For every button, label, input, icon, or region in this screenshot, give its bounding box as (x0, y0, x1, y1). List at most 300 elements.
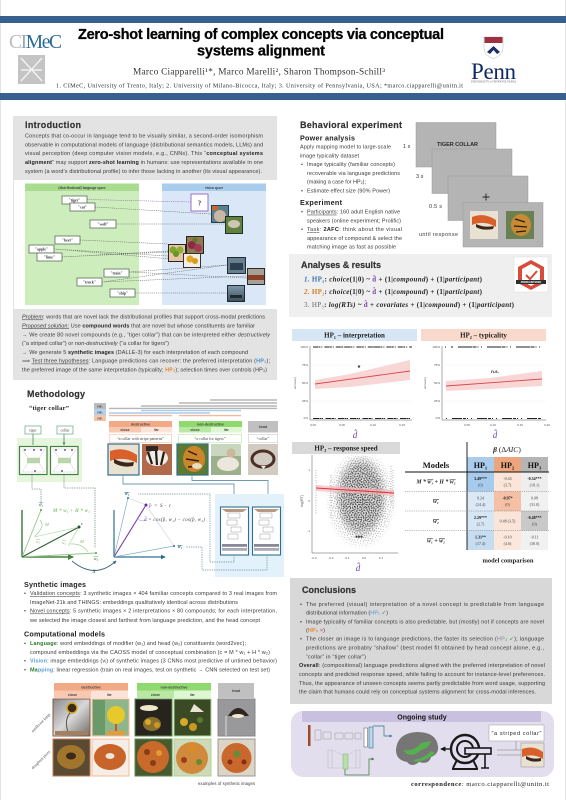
image: ship (227, 285, 245, 302)
coefficient values: (24.4) (476, 502, 486, 507)
timing labels: until response (419, 232, 458, 238)
coefficient values: (4.6) (504, 541, 512, 546)
figure: examples of synthetic images (30, 683, 255, 786)
axis labels: -0.3 (311, 556, 317, 560)
condition headers: non-destructive (197, 422, 224, 426)
caption: examples of synthetic images (198, 781, 255, 786)
significance stars: *** (355, 535, 363, 542)
arrows to scanner (497, 741, 521, 755)
text block: introduction body: alignment” may support zero-shot learning in humans: use representations available in one (25, 160, 263, 166)
image: lamp head (218, 699, 255, 736)
text block: power analysis: recoverable via language predictions (307, 171, 400, 177)
title: Zero-shot learning of complex concepts via conceptual (78, 27, 444, 43)
text block: power analysis: image typicality dataset (300, 153, 359, 159)
choice image: tiger (506, 211, 534, 239)
text block: conclusion bullets: predictions are probably “shallow” (best model fit obtained by head concept alone, e.g., (306, 646, 544, 652)
table title: β (ΔAIC) (492, 445, 521, 454)
axis labels: 1 (308, 468, 310, 472)
heading bar: Ongoing study (397, 714, 447, 722)
chart header: HP₂ – typicality (460, 332, 507, 340)
text block: problem and solution: ⟹ Test three hypotheses: Language predictions can recover: the preferred interpretation (HP₁); (22, 359, 270, 365)
text block: power analysis: Apply mapping model to large-scale (300, 145, 391, 151)
axis labels: 0.1 (379, 556, 383, 560)
coefficient values: (17.4) (476, 541, 486, 546)
word labels (35, 198, 128, 295)
regression line (315, 371, 410, 384)
distance formula: d̂ = cos(p̂, w₁) − cos(p̂, w₂) (144, 517, 205, 523)
text block: problem and solution (22, 314, 271, 374)
panel: introduction (13, 116, 277, 380)
condition headers: head (259, 425, 267, 429)
connectors from images to CNNs (123, 475, 268, 502)
CNN 1 (220, 507, 248, 555)
model names (415, 478, 456, 544)
grid headers: close (151, 693, 160, 697)
text block: problem and solution: the preferred image of the same interpretation (typicality; HP₂); selection times over controls (HP₃) (22, 368, 267, 374)
panel: methodology (17, 389, 284, 577)
table cells (467, 472, 548, 550)
grid headers: far (107, 693, 112, 697)
text block: synthetic images (24, 591, 277, 624)
network: collar (50, 446, 78, 474)
condition headers: far (224, 428, 229, 432)
badge: preregistered: PREREGISTERED (521, 281, 541, 284)
grid headers: far (190, 693, 195, 697)
grid headers: close (68, 693, 77, 697)
chart: compound vector space: c (81, 521, 83, 526)
axis labels: 50% (434, 381, 440, 385)
x label: d̂ (353, 429, 358, 440)
axis labels: 100% (300, 345, 308, 349)
chart: HP2 typicality (421, 329, 550, 440)
heading: behavioral experiment: Behavioral experiment (300, 120, 402, 130)
data rugs (313, 346, 412, 348)
slide: blank (432, 149, 512, 194)
CNN 2 (252, 507, 280, 555)
data rugs (445, 346, 542, 348)
coefficient values: -0.11 (530, 534, 539, 540)
coefficient values: 2.29*** (474, 515, 487, 520)
condition headers: close (120, 428, 130, 432)
slide: cue: TIGER COLLAR (437, 142, 478, 148)
word labels: "beet" (62, 238, 73, 242)
coefficient values: (30.0) (530, 541, 540, 546)
axis labels: 0.00 (310, 423, 316, 427)
image: tiger far (211, 444, 241, 475)
interpretation phrases: “collar” (257, 436, 270, 441)
heading bar (302, 711, 541, 722)
language space: (distributional) language space (58, 186, 106, 190)
language network block (17, 426, 82, 482)
coefficient values: 0.48 (3.5) (500, 518, 516, 524)
text block: experiment: matching image as fast as possible (307, 245, 396, 251)
vision space: vision space (205, 186, 224, 190)
axis labels: 50% (302, 381, 308, 385)
section: computational models (24, 630, 277, 674)
text block: synthetic images: Novel concepts: 5 synthetic images × 2 interpretations × 80 compounds; for each interpretation, (30, 608, 277, 614)
text block: power analysis (300, 145, 400, 194)
word input: tiger: tiger (29, 428, 37, 432)
icon: brain (396, 732, 438, 765)
image: pizza non-destructive close (135, 739, 172, 776)
image: truck (227, 257, 246, 274)
regression ribbon (446, 371, 542, 391)
model names: w₂ (433, 519, 439, 525)
text block: overall (299, 663, 545, 696)
coefficient values: (0) (478, 482, 483, 488)
text block: problem and solution: Proposed solution: Use compound words that are novel but whose constituents are familiar (22, 323, 255, 329)
text block: introduction body: visual perception (deep computer vision models, e.g., CNNs). This “conceptual systems (25, 151, 263, 157)
condition headers: far (154, 428, 159, 432)
panel: analyses and results (289, 254, 552, 317)
text block: overall: Thus, the appearance of unseen concepts seems partly predictable from word usage, supporting (299, 681, 545, 687)
axis labels: accuracy (293, 377, 297, 389)
chart: prediction vector space: w₂ (178, 545, 183, 550)
chart: compound vector space: M (79, 539, 84, 544)
compound formula: M * w₁ + H * w₂ (52, 509, 90, 514)
regression ribbon (315, 360, 410, 389)
panel: ongoing study (291, 711, 554, 777)
interpretation phrases: “a collar for tigers” (195, 436, 226, 441)
chart header: HP₃ – response speed (314, 444, 378, 452)
text block: experiment: Participants: 160 adult English native (307, 210, 400, 216)
coefficient values (474, 476, 542, 546)
column headers: Models (423, 460, 450, 470)
unknown image box (191, 194, 208, 211)
text block: power analysis: • (301, 162, 303, 168)
coefficient values: (0) (532, 522, 537, 526)
text block: conclusion bullets: The preferred (visual) interpretation of a novel concept is predictable from language (306, 602, 544, 608)
grid headers: head (232, 689, 240, 693)
row label: sunflower lamp: sunflower lamp (30, 712, 51, 733)
choice image: collar (470, 211, 498, 239)
hypothesis legend: HP₁ (97, 410, 103, 414)
coefficient values: 0.24 (477, 496, 484, 500)
image: wolf (225, 216, 243, 234)
chart: compound vector space (22, 502, 99, 561)
model names: M * w₁ + H * w₂ (415, 478, 456, 486)
axis labels: 0.20 (544, 423, 550, 427)
text block: power analysis: • (301, 188, 303, 194)
compound example label: “tiger collar” (29, 405, 69, 412)
text block: power analysis: (making a case for HP₂); (307, 180, 366, 186)
heading: synthetic images: Synthetic images (24, 580, 86, 589)
condition headers: close (190, 428, 200, 432)
regression line (446, 379, 542, 386)
slide: choice (463, 202, 543, 247)
image: head collar (248, 444, 278, 475)
subheading: experiment: Experiment (300, 198, 343, 207)
axis labels: 0.15 (517, 423, 523, 427)
condition headers (109, 421, 278, 432)
comparison bars (109, 400, 277, 416)
text block: conclusion bullets: • (300, 637, 302, 643)
table caption: model comparison (482, 558, 534, 564)
authors: Marco Ciapparelli¹*, Marco Marelli², Sharon Thompson-Schill³ (133, 68, 385, 78)
scatter side columns (316, 466, 393, 520)
heading: conclusions: Conclusions (302, 585, 356, 595)
text block: synthetic images: we selected the image closest and farthest from language prediction, and the head concept (29, 618, 260, 624)
image: cat (211, 205, 229, 223)
text block: problem and solution: Problem: words that are novel lack the distributional profiles that support cross-modal predictions (22, 314, 265, 320)
text block: conclusion bullets: (HP₂ ×) (306, 628, 325, 634)
text block: computational models: • (24, 668, 26, 674)
image: lamp destructive far (92, 699, 129, 736)
title (78, 27, 444, 60)
text block: experiment: speakers (online experiment; Prolific) (307, 218, 401, 224)
vision space (162, 184, 266, 305)
text block: conclusion bullets: • (300, 602, 302, 608)
text block: experiment: • (301, 210, 303, 216)
stimulus phrase (489, 725, 544, 741)
axis labels: 0 (308, 499, 310, 503)
axis labels: 25% (302, 399, 308, 403)
slide: fixation (448, 176, 528, 220)
word labels: "ship" (117, 291, 128, 295)
text block: computational models (24, 641, 277, 674)
word input: collar: collar (60, 428, 70, 432)
text block: introduction body: observable in computational models of language (distributional semantics models, LLMs) and (25, 142, 263, 148)
text block: experiment: • (301, 227, 303, 233)
word labels: "lime" (44, 255, 55, 259)
axis labels: 75% (434, 363, 440, 367)
text block: introduction body: system (a word’s distributional profile) to infer those lacking in another (its visual appearance). (25, 169, 262, 175)
text block: synthetic images: • (24, 608, 26, 614)
axis labels (423, 345, 550, 427)
not significant label: n.s. (491, 369, 499, 374)
timing labels: 0.5 s (429, 204, 442, 210)
language space (25, 184, 139, 305)
badge: preregistered (514, 257, 548, 292)
timing labels: 3 s (416, 174, 424, 180)
dashed connectors to vectors (32, 475, 95, 548)
text block: computational models: • (24, 641, 26, 647)
coefficient values: -0.34*** (527, 476, 542, 481)
coefficient values: (2.7) (477, 522, 485, 526)
x label: d̂ (356, 562, 361, 573)
chart: HP1 interpretation (292, 329, 417, 440)
text block: conclusion bullets: distributional information (HP₁ ✓) (306, 611, 388, 617)
coefficient values: -0.48*** (527, 515, 542, 520)
regression line (316, 485, 394, 496)
stimulus image (521, 743, 544, 767)
axis labels: accuracy (423, 377, 427, 389)
coefficient values: (3.7) (504, 482, 512, 488)
text block: computational models: Language: word embeddings of modifier (w₁) and head (w₂) constituents (word2vec); (30, 641, 246, 647)
text block: overall: the claim that humans could rely on conceptual systems alignment for cross-modal inferences. (299, 690, 536, 696)
dashed connectors from CNNs (138, 494, 267, 570)
arrow: scanner to brain (441, 748, 450, 750)
word boxes (29, 196, 135, 297)
axis labels (293, 345, 405, 427)
text block: overall: Overall: (compositional) language predictions aligned with the preferred interpretation of novel (299, 663, 545, 669)
axis labels: log(RT) (300, 495, 304, 507)
text block: overall: concepts and predicted response speed, while failing to account for instance-level preferences. (299, 672, 545, 678)
text block: conclusion bullets: Image typicality of familiar concepts is also predictable, but (mostly) not if concepts are novel (306, 619, 544, 625)
image: lamp non-destructive far (174, 699, 211, 736)
grid headers: destructive (81, 686, 101, 690)
image: tiger close (177, 444, 208, 475)
coefficient values: 0.08 (531, 496, 538, 500)
icon: MRI scanner (451, 735, 491, 769)
chart: compound vector space: w₁ (39, 502, 44, 507)
word labels: "truck" (83, 280, 96, 284)
text block: problem and solution: (“a striped collar”) or non-destructively (“a collar for tigers”) (22, 341, 169, 347)
axis labels: 0% (436, 416, 440, 420)
prediction formula: p̂ = S · c (148, 504, 172, 509)
axis labels: 0% (304, 416, 308, 420)
word labels: "cat" (78, 205, 87, 209)
text block: conclusion bullets: • (300, 619, 302, 625)
vision network block (215, 494, 284, 577)
affiliations: 1. CIMeC, University of Trento, Italy; 2. University of Milano-Bicocca, Italy; 3. University of Pennsylvania, USA; *marco.ciapparelli@unitn.it (56, 82, 463, 90)
subheading: power analysis: Power analysis (300, 134, 355, 142)
heading: computational models: Computational models (24, 630, 105, 638)
image: striped collar close (108, 444, 139, 475)
word labels: "tiger" (69, 198, 80, 202)
axis labels: 0.05 (339, 423, 345, 427)
word labels: "train" (110, 271, 123, 275)
significance star: * (358, 365, 361, 372)
condition headers: destructive (131, 422, 150, 426)
coefficient values: 3.49*** (474, 476, 487, 481)
heading: analyses and results: Analyses & results (301, 260, 381, 270)
axis labels: -0.1 (344, 556, 350, 560)
table rules (405, 442, 549, 550)
chart header: HP₁ – interpretation (324, 332, 385, 340)
stimulus phrase: "a striped collar" (492, 731, 542, 737)
text block: synthetic images: ImageNet-21k and THINGS: embeddings qualitatively identical across distributions (30, 600, 238, 606)
axis labels: 100% (432, 345, 440, 349)
grid headers: non-destructive (161, 686, 187, 690)
heading: introduction: Introduction (25, 120, 81, 130)
coefficient values: (18.1) (530, 482, 540, 488)
axis labels: 75% (302, 363, 308, 367)
image: beet (186, 236, 204, 254)
text block: introduction body: Concepts that co-occur in language tend to be visually similar, a second-order isomorphism (25, 134, 263, 140)
axis labels: -1 (307, 529, 310, 533)
image: pizza destructive close (53, 739, 90, 776)
image: limes (183, 253, 201, 268)
image: lamp non-destructive close (135, 699, 172, 736)
logo: Penn: Penn (471, 59, 516, 84)
arrow: mapping S (72, 561, 116, 575)
coefficient values: -0.97* (502, 496, 513, 500)
interpretation phrases (109, 434, 278, 443)
coefficient values: -0.10 (503, 534, 512, 540)
network: tiger (20, 446, 47, 474)
word labels: "wolf" (97, 222, 109, 226)
interpretation phrases: “a collar with stripe patterns” (117, 436, 164, 441)
hypothesis legend: HP₂ (97, 416, 103, 420)
row label: doughnut pizza: doughnut pizza (30, 749, 51, 770)
text block: conclusion bullets: The closer an image is to language predictions, the faster its selection (HP₃ ✓); language (306, 637, 544, 643)
text block: computational models: • (24, 658, 26, 664)
chart: prediction vector space: w₁ (125, 492, 130, 497)
model formula 2: 2. HP₂: choice(1|0) ~ d̂ + (1|compound) + (1|participant) (303, 288, 483, 296)
text block: experiment (301, 210, 402, 251)
image: pizza non-destructive far (174, 739, 211, 776)
section: synthetic images (24, 580, 277, 624)
model formula 3: 3. HP₃: log(RTs) ~ d̂ + covariates + (1|compound) + (1|participant) (304, 301, 515, 309)
text block: synthetic images: Validation concepts: 3 synthetic images × 404 familiar concepts compared to 3 real images from (30, 591, 277, 597)
image: striped collar far (142, 444, 172, 475)
text block: experiment: appearance of compound & select the (307, 236, 402, 242)
x label: d̂ (493, 429, 498, 440)
heading: methodology: Methodology (27, 389, 85, 399)
text block: computational models: Mapping: linear regression (train on real images, test on synthetic → CNN selected on test set) (30, 668, 270, 674)
logo: CIMeC (9, 32, 62, 84)
header band top (0, 16, 566, 23)
column headers: HP₂ (501, 461, 515, 470)
mapping dashed lines (54, 200, 247, 293)
model names: w₁ + w₂ (427, 538, 445, 544)
chart: compound vector space: w₁ (36, 539, 41, 544)
axis labels: 0.10 (370, 423, 376, 427)
image: apples (168, 244, 186, 262)
model names: w₁ (433, 499, 439, 505)
coefficient values: (0) (505, 502, 510, 507)
text block: experiment: Task: 2AFC: think about the visual (307, 227, 402, 233)
logo: CIMeC: CIMeC (9, 32, 62, 53)
axis labels: -0.2 (328, 556, 334, 560)
axis labels: 0.15 (399, 423, 405, 427)
chart: compound vector space: w₂ (94, 556, 99, 561)
column headers: HP₃ (528, 461, 542, 470)
model formula 1: 1. HP₁: choice(1|0) ~ d̂ + (1|compound) + (1|participant) (304, 276, 483, 284)
scatter outer cloud (326, 455, 396, 549)
scatter dense cloud (334, 456, 388, 538)
text block: computational models: Vision: image embeddings (vᵢ) of synthetic images (3 CNNs most predictive of untimed behavior) (30, 658, 277, 664)
axis labels (300, 468, 383, 560)
column headers: HP₁ (474, 461, 488, 470)
text block: introduction body (25, 134, 263, 175)
column headers (423, 457, 548, 472)
title: systems alignment (197, 44, 325, 60)
text block: conclusion bullets (300, 602, 544, 660)
coefficient values: (31.0) (530, 502, 540, 507)
text block: conclusion bullets: “collar” in “tiger collar”) (306, 654, 366, 660)
language network diagram (328, 750, 374, 775)
header band bottom (0, 93, 566, 100)
logo: Penn: UNIVERSITY of PENNSYLVANIA (471, 80, 516, 84)
unknown image box: ? (198, 200, 202, 208)
chart: HP3 response speed (292, 442, 400, 573)
text block: problem and solution: → We create 80 novel compounds (e.g., “tiger collar”) that can be interpreted either destructively (22, 332, 271, 338)
text block: synthetic images: • (24, 591, 26, 597)
text block: problem and solution: → We generate 5 synthetic images (DALLE-3) for each interpretation of each compound (22, 350, 248, 356)
coefficient values: 1.31** (475, 534, 486, 540)
axis labels: 0.10 (490, 423, 496, 427)
image: pizza head (218, 739, 255, 776)
chart: prediction vector space (114, 492, 205, 557)
chart: compound vector space: w₂ (62, 540, 67, 545)
trial sequence (403, 122, 543, 247)
chart: compound vector space: M (44, 522, 49, 527)
axis labels: 0.0 (362, 556, 366, 560)
logo: Penn (471, 37, 516, 84)
grid headers (54, 683, 254, 698)
image: pizza destructive far (92, 739, 129, 776)
table: model comparison (405, 442, 549, 564)
hypothesis legend: HP₃ (97, 404, 103, 408)
timing labels: 1 s (403, 144, 411, 150)
figure: language and vision spaces (14, 180, 277, 309)
panel: behavioral experiment (300, 120, 543, 251)
axis labels: 0.05 (464, 423, 470, 427)
arrow: mapping S: S (93, 569, 96, 575)
text block: computational models: compound embeddings via the CAOSS model of conceptual combination (c = M * w₁ + H * w₂) (30, 650, 270, 656)
